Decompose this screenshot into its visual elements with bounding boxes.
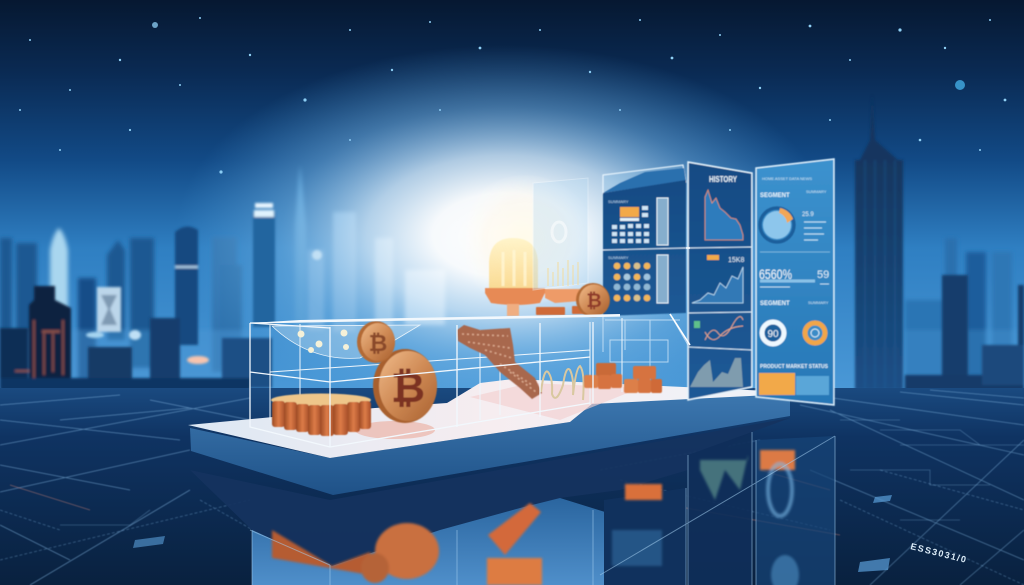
grey area chart [690,358,743,387]
spring coil [541,366,584,400]
back wire lines [270,318,622,420]
coin edge [357,321,395,363]
mesh bowl in glass box [272,325,420,358]
copper block small [572,306,587,314]
big metric: 6560% [759,266,792,282]
cube top wedge [603,168,686,193]
small coin stack right [624,366,662,393]
coin edge [576,283,610,317]
bowl nodes [298,330,349,353]
label top: SUMMARY [608,199,629,204]
wave lines [705,317,743,340]
orange callout [759,373,795,395]
calendar strip [620,218,639,221]
wire rectangles [603,314,688,385]
copper block [536,307,565,315]
gauge mark [811,329,819,337]
wire frame below cube [603,314,688,385]
data cube centre face [603,165,686,316]
bowl outline [272,325,420,358]
chart divider [688,247,752,350]
ring gauge white [762,322,784,344]
coin face [361,323,395,361]
label lower: SUMMARY [608,255,629,260]
copper cylinder stack [271,394,371,436]
stack lower mid [638,379,651,393]
key texture [462,334,536,392]
small coin stack left [584,363,622,389]
front columns [296,404,348,436]
calendar widget [612,206,649,243]
donut orange slice [779,208,793,223]
sun flare [455,175,595,305]
value tag [707,255,719,260]
side barcode top [657,198,668,245]
donut chart [760,208,794,242]
key body [457,325,542,399]
metric subline [760,284,829,287]
metric bar [760,280,815,282]
coin face [579,284,609,316]
back columns [272,401,371,432]
reflection: right panel [756,436,835,585]
gauge ring [805,323,825,343]
city glow [170,40,860,440]
upper bitcoin coin [576,283,610,317]
cube face [603,180,686,316]
value text: 15K8 [728,257,744,264]
yellow dome [489,238,538,288]
floor blue tags [133,495,892,572]
ghost bars [548,260,578,286]
divider [603,248,686,250]
top shelf highlight [250,314,620,323]
reflection: dark data panels [604,488,686,585]
plate stem [507,304,519,316]
section side heading: SUMMARY [808,300,829,305]
circuit grid lines on floor [0,390,1024,585]
stack upper [596,363,616,376]
glowing floor [0,388,1024,585]
dome columns [503,250,525,286]
cylinder tops [271,394,371,406]
small bitcoin coin [357,321,395,363]
night sky background [0,0,1024,400]
glass box behind items [270,318,622,420]
platform top surface [188,379,790,458]
reflection: dark platform shadow [190,418,790,566]
second plate [545,289,580,303]
pink raised ramp [470,383,640,420]
stack lower right [651,379,662,393]
panel header text: HISTORY [709,175,738,184]
dashboard tabs: HOME ASSET DATA NEWS [762,176,812,181]
copper ornate key [457,325,542,399]
rising area chart [692,267,743,303]
far skyline [0,165,1024,395]
stack lower mid [598,375,611,389]
platform side [190,392,790,495]
ghost translucent panel [533,178,588,290]
coin symbol: ₿ [369,330,387,356]
lamp plate [485,288,545,305]
large bitcoin coin [373,349,437,423]
falling area chart [705,190,743,240]
chart panel right face [688,162,752,400]
reflection: chart panel [688,432,752,585]
floor code text: ESS3031/0 [910,541,968,565]
stars [19,17,1006,174]
gauge ring [762,322,784,344]
heading one: SEGMENT [760,193,790,199]
ring gauge orange [805,323,825,343]
legend lines [804,222,826,240]
coin shadow [355,421,435,439]
heading one side: SUMMARY [806,189,827,194]
stack lower left [624,379,638,393]
reflection: bright blue band [252,498,612,585]
banner heading: PRODUCT MARKET STATUS [760,364,829,370]
calendar highlight [620,207,639,217]
coin edge [373,349,437,423]
donut ring [760,208,794,242]
far-right dashboard panel [756,159,834,405]
wire connectors [670,248,690,345]
frame outline [250,316,620,447]
side metric: 59 [817,269,829,281]
blue callout [796,376,829,395]
calendar cells [612,206,649,243]
coin face [379,351,437,421]
token dots [614,263,650,301]
section divider [760,251,830,253]
stack lower right [611,374,622,388]
wire frame top [603,165,686,193]
ghost panel face [533,178,588,290]
stack lower left [584,375,598,388]
line chart icon [694,321,700,328]
reflection: coins and stack [272,450,799,585]
side barcode lower [657,255,668,303]
section heading: SEGMENT [760,301,790,307]
dashboard face [756,159,834,405]
reflection: wire frame lines [250,432,835,585]
coin symbol: ₿ [391,364,425,411]
platform reflection [190,418,835,585]
mid and near skyline [0,95,1024,400]
coin symbol: ₿ [586,291,602,312]
donut legend: 25.9 [802,212,814,218]
glass box front frame [250,314,620,447]
gauge value: 90 [767,329,779,340]
lamp on glass box [455,175,595,316]
ghost ring [552,222,566,242]
chart panel face [688,162,752,400]
donut disc [763,211,791,239]
platform base [188,379,790,495]
stack upper [633,366,656,379]
